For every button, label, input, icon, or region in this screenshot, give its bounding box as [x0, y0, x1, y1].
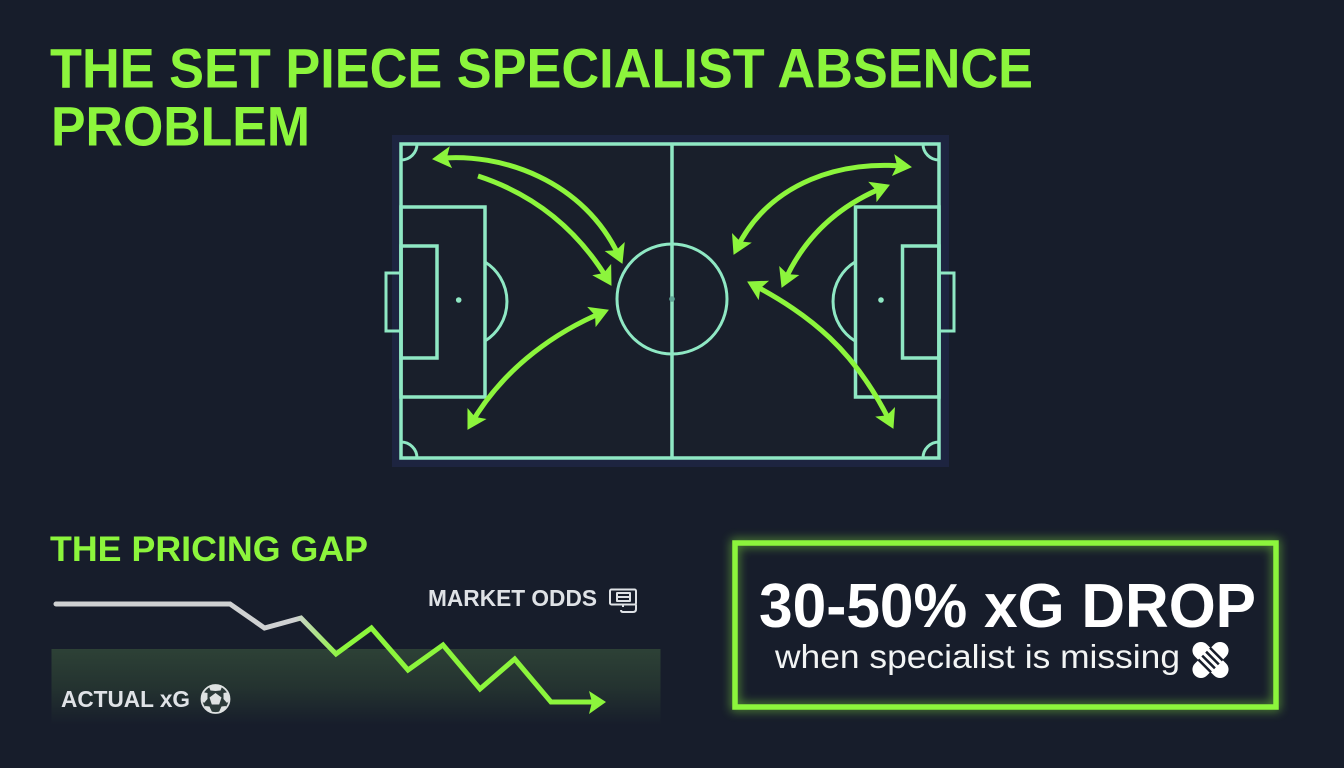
- line arrowhead: [589, 691, 606, 714]
- label: actual xG: ACTUAL xG: [61, 686, 190, 712]
- icon: crossed bandages: [1189, 638, 1232, 682]
- penalty and centre spots: [456, 296, 884, 303]
- pitch backing panel: [392, 135, 949, 467]
- title: [50, 36, 1033, 158]
- callout: xG drop: [735, 543, 1276, 707]
- title: PROBLEM: [51, 94, 310, 158]
- actual xG band: [52, 649, 660, 725]
- icon: market odds screen: [610, 590, 636, 612]
- arrows: right side deliveries: [736, 165, 906, 423]
- callout glow frame: [735, 543, 1276, 707]
- title: THE SET PIECE SPECIALIST ABSENCE: [50, 36, 1033, 100]
- icon: soccer ball: [201, 684, 230, 713]
- callout subtext: when specialist is missing: [774, 638, 1180, 675]
- pricing gap chart: [52, 588, 660, 714]
- heading: the pricing gap: THE PRICING GAP: [50, 530, 368, 569]
- label: market odds: MARKET ODDS: [428, 585, 597, 611]
- arrows: left side deliveries: [438, 158, 620, 425]
- callout headline: 30-50% xG DROP: [759, 572, 1256, 641]
- pitch markings: [386, 144, 954, 458]
- pitch diagram: [386, 135, 954, 467]
- market odds to actual xG line: [56, 604, 600, 702]
